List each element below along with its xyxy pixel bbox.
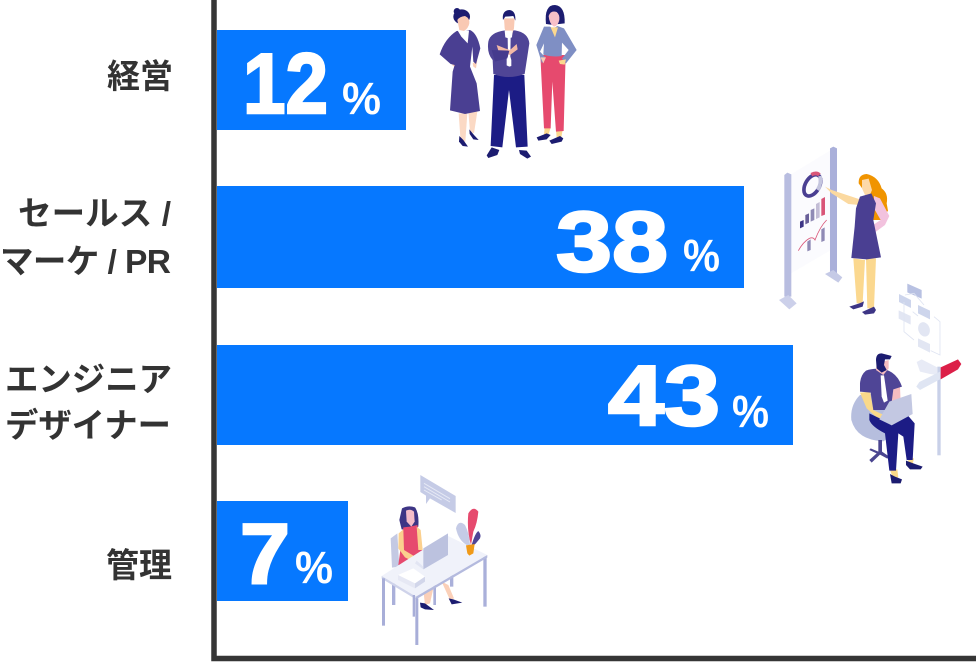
category label: セールス / マーケ / PR: セールス / [18, 196, 171, 233]
category label: エンジニア デザイナー: エンジニア [5, 362, 172, 399]
illustration: flowchart and engineer with laptop [851, 284, 961, 483]
desk legs behind [392, 557, 487, 607]
bar: 管理 7%: 7 [240, 507, 290, 602]
bar: 経営 12%: 12 [243, 37, 328, 132]
category label: セールス / マーケ / PR: マーケ / PR [0, 244, 171, 281]
bar: エンジニア 43%: % [732, 386, 769, 437]
bar: エンジニア 43% [217, 345, 793, 445]
bar: エンジニア 43%: 43 [608, 349, 720, 444]
speech bubble [420, 475, 456, 513]
category label: エンジニア デザイナー [5, 362, 172, 445]
bar: セールス 38% [217, 186, 744, 290]
engineer on chair [851, 353, 923, 483]
signpost [916, 359, 961, 455]
bar chart [800, 220, 804, 228]
woman seated [398, 506, 462, 610]
chair [391, 533, 399, 568]
desk legs front [382, 578, 418, 645]
flowchart [899, 284, 940, 355]
bar: セールス 38%: % [683, 230, 720, 281]
line chart [807, 239, 811, 251]
category label: エンジニア デザイナー: デザイナー [5, 407, 171, 445]
woman left [440, 8, 480, 147]
bar: 管理 7%: % [295, 542, 333, 593]
illustration: three business people [440, 5, 577, 159]
donut chart [800, 172, 824, 199]
man centre [487, 10, 531, 159]
category label: セールス / マーケ / PR [0, 196, 171, 281]
presentation board [779, 147, 842, 309]
woman [825, 174, 889, 315]
category label: 管理: 管理 [106, 548, 172, 585]
paper stack [398, 568, 425, 588]
bar: セールス 38%: 38 [556, 195, 668, 290]
laptop [423, 533, 448, 569]
potted plant [456, 509, 481, 556]
category label: 経営: 経営 [107, 59, 173, 96]
woman right [536, 5, 577, 144]
chart axes [214, 0, 976, 658]
illustration: woman presenting chart board [779, 147, 889, 315]
bar: 経営 12%: % [342, 73, 381, 124]
illustration: woman at office desk [382, 475, 487, 645]
desk top [382, 535, 487, 597]
bar: 経営 12% [217, 30, 406, 132]
bar: 管理 7% [217, 501, 348, 602]
